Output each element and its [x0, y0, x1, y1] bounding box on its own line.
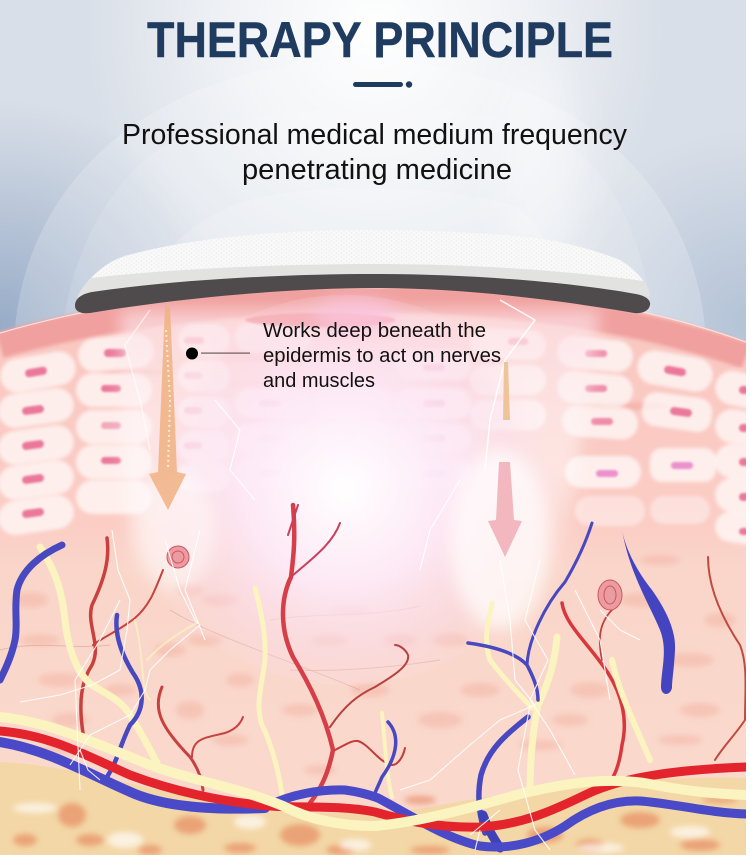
left penetration arrow	[149, 306, 186, 510]
skin edge highlight	[0, 285, 746, 342]
callout	[186, 320, 501, 392]
cell nuclei	[22, 337, 749, 535]
subtitle: Professional medical medium frequency	[122, 119, 627, 151]
cell layer pills	[0, 322, 750, 551]
blood vessels and nerves	[0, 505, 746, 848]
patch grey edge	[77, 264, 650, 298]
callout leader line	[201, 352, 250, 354]
interstitial streaks	[90, 353, 670, 424]
callout text	[263, 320, 501, 392]
patch top fabric	[88, 230, 644, 292]
skin cross-section panel	[0, 285, 750, 855]
tapered blue vein	[622, 530, 675, 694]
callout dot	[186, 348, 198, 360]
subtitle: penetrating medicine	[242, 154, 512, 186]
callout text: and muscles	[263, 370, 375, 392]
sweat glands	[167, 546, 622, 610]
electrode patch	[75, 230, 650, 313]
dermis mottled texture	[12, 555, 736, 775]
callout text: epidermis to act on nerves	[263, 345, 501, 367]
dermis fine lines	[0, 606, 440, 690]
patch dark band	[75, 274, 650, 313]
main vessel bundle	[0, 742, 265, 809]
subtitle	[122, 119, 627, 186]
fat layer	[0, 762, 746, 855]
cream nerves	[40, 547, 650, 803]
background panel with concentric domes	[0, 0, 746, 345]
callout text: Works deep beneath the	[263, 320, 486, 342]
title: THERAPY PRINCIPLE	[147, 12, 613, 68]
thin red arteries	[81, 505, 746, 803]
glow from patch	[120, 295, 600, 685]
lightning sparks	[20, 300, 640, 850]
upper skin band	[0, 300, 746, 356]
title divider	[353, 81, 412, 88]
right penetration arrow	[488, 362, 522, 557]
thin blue veins	[0, 523, 592, 848]
